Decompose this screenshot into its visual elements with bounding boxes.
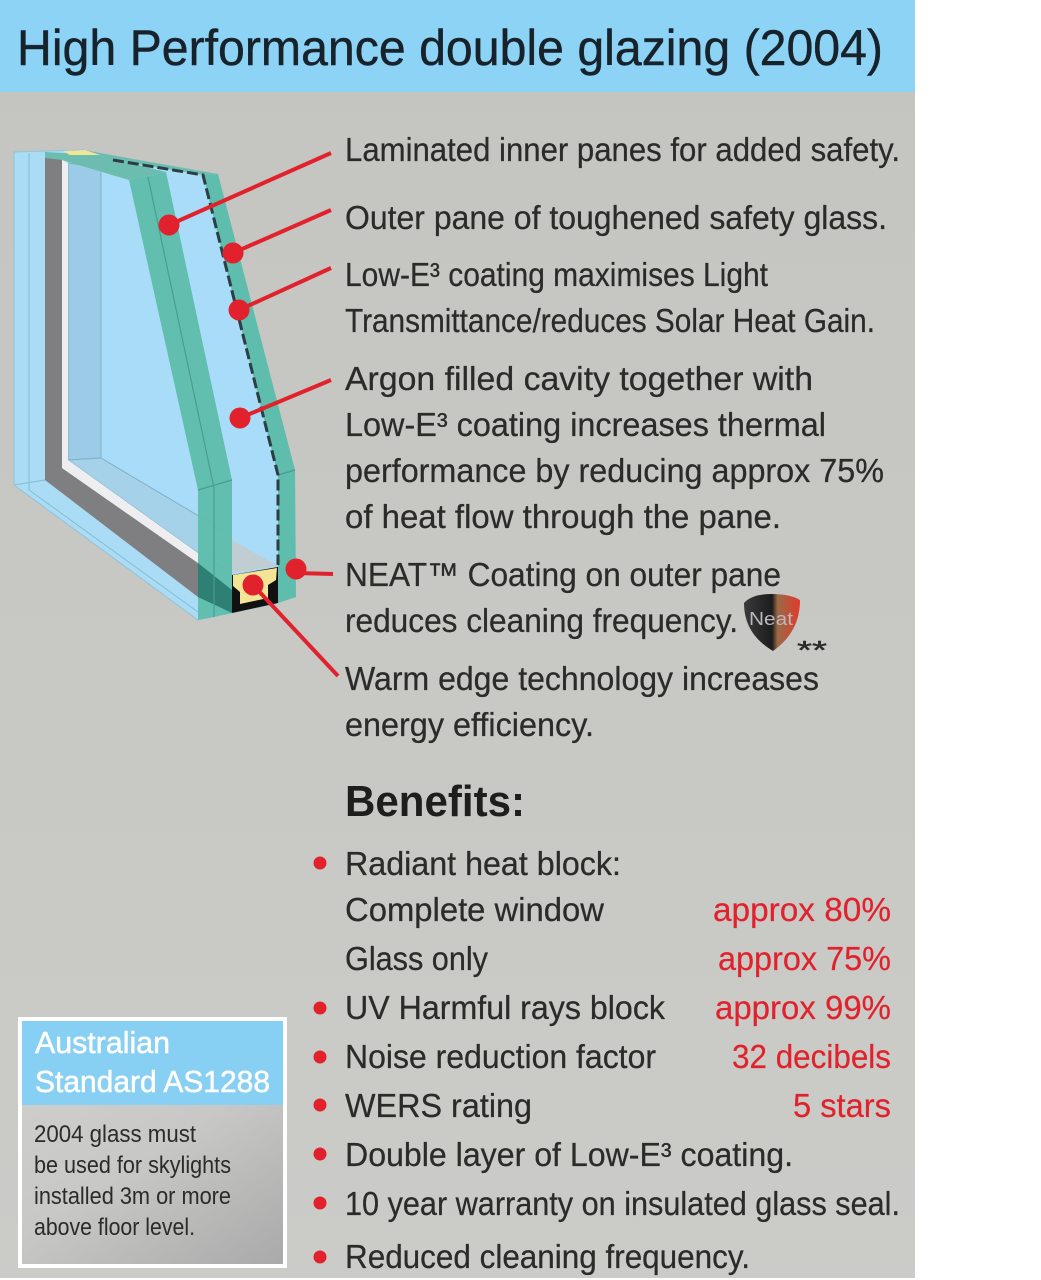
feature: low-E coating: Transmittance/reduces Solar Heat Gain.	[345, 302, 875, 339]
feature: NEAT coating: NEAT™ Coating on outer pane	[345, 556, 781, 593]
panel heading	[22, 1021, 283, 1105]
outer toughened pane	[203, 174, 296, 603]
callout pointers	[158, 153, 338, 676]
benefits list	[314, 845, 900, 1275]
panel text	[34, 1121, 231, 1241]
title banner	[0, 0, 915, 92]
outer frame glass	[14, 150, 278, 620]
feature: argon cavity: Low-E³ coating increases thermal	[345, 406, 826, 443]
icon: Neat shield: Neat	[749, 609, 793, 629]
benefit: noise reduction	[314, 1038, 891, 1075]
panel text: be used for skylights	[34, 1152, 231, 1179]
pointer: laminated panes	[158, 153, 331, 236]
low-E coating dashed line	[113, 160, 278, 565]
panel: Australian Standard	[20, 1019, 285, 1266]
benefits heading: Benefits:	[345, 777, 525, 826]
panel heading: Australian	[35, 1025, 170, 1060]
reveal side	[68, 163, 101, 460]
benefit: WERS rating	[314, 1087, 891, 1124]
feature: NEAT coating: reduces cleaning frequency.	[345, 602, 738, 639]
window opening	[68, 165, 198, 553]
benefit: UV block: UV Harmful rays block	[345, 989, 665, 1026]
top edge of outer pane	[83, 150, 218, 175]
title: High Performance double glazing (2004)	[17, 20, 883, 76]
reveal sill	[68, 458, 278, 573]
pointer: NEAT coating	[286, 558, 333, 580]
white frame strip	[62, 160, 198, 563]
benefit: radiant heat block: approx 75%	[718, 940, 891, 977]
benefit: radiant heat block: Complete window	[345, 891, 604, 928]
benefit: radiant heat block: approx 80%	[713, 891, 891, 928]
benefit: UV block	[314, 989, 891, 1026]
feature: warm edge	[345, 660, 819, 743]
air cavity	[97, 156, 278, 575]
pointer: argon cavity	[230, 380, 331, 428]
benefit: radiant heat block: Radiant heat block:	[345, 845, 621, 882]
icon: Neat shield	[744, 594, 800, 651]
benefit: radiant heat block	[314, 845, 891, 977]
benefit: WERS rating: 5 stars	[793, 1087, 891, 1124]
benefit: WERS rating: WERS rating	[345, 1087, 532, 1124]
feature: outer pane: Outer pane of toughened safety glass.	[345, 199, 887, 236]
pointer: outer pane	[222, 210, 331, 264]
footnote asterisks: **	[797, 635, 827, 665]
benefit: double low-E: Double layer of Low-E³ coating.	[345, 1136, 793, 1173]
panel heading: Standard AS1288	[35, 1064, 270, 1099]
top edge of inner pane	[45, 152, 166, 180]
spacer top	[63, 150, 100, 155]
benefit: cleaning: Reduced cleaning frequency.	[345, 1238, 750, 1275]
feature: warm edge: Warm edge technology increases	[345, 660, 819, 697]
pointer: warm edge	[242, 574, 338, 676]
benefit: noise reduction: Noise reduction factor	[345, 1038, 656, 1075]
benefit: UV block: approx 99%	[715, 989, 891, 1026]
feature: low-E coating: Low-E³ coating maximises Light	[345, 256, 768, 293]
pointer: low-E coating	[228, 268, 331, 320]
feature: argon cavity: performance by reducing approx 75%	[345, 452, 884, 489]
panel text: 2004 glass must	[34, 1121, 196, 1148]
feature: laminated panes: Laminated inner panes for added safety.	[345, 131, 900, 168]
window cross-section diagram	[14, 150, 296, 620]
benefit: radiant heat block: Glass only	[345, 940, 488, 977]
feature: low-E coating	[345, 256, 875, 339]
feature: NEAT coating	[345, 556, 781, 639]
cavity sill	[232, 540, 278, 573]
feature: argon cavity: of heat flow through the pane.	[345, 498, 781, 535]
panel text: installed 3m or more	[34, 1183, 231, 1210]
feature: argon cavity: Argon filled cavity together with	[345, 360, 813, 397]
benefit: warranty: 10 year warranty on insulated glass seal.	[345, 1185, 900, 1222]
feature: warm edge: energy efficiency.	[345, 706, 594, 743]
panel text: above floor level.	[34, 1214, 195, 1241]
inner laminated pane	[129, 172, 232, 620]
dark frame	[45, 152, 198, 597]
warm edge spacer	[232, 567, 278, 613]
benefit: noise reduction: 32 decibels	[732, 1038, 891, 1075]
feature: argon cavity	[345, 360, 884, 535]
